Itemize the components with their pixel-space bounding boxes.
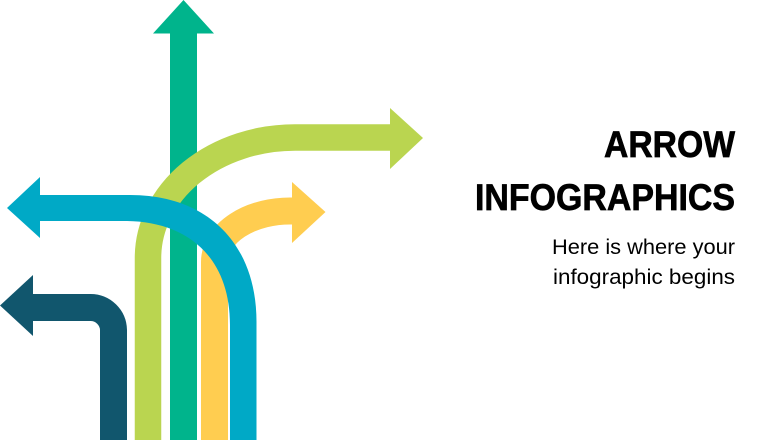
arrow: blue curving left [7,177,256,440]
subtitle: Here is where your [552,236,735,259]
subtitle: infographic begins [553,266,735,289]
arrow: dark navy turning left [0,275,114,440]
title: INFOGRAPHICS [475,177,735,218]
arrow: yellow curving right [214,182,326,440]
arrow: lime green curving right [148,108,423,440]
title [475,124,735,218]
arrow: teal green pointing up [153,0,214,440]
subtitle [552,236,735,289]
title: ARROW [604,124,735,165]
